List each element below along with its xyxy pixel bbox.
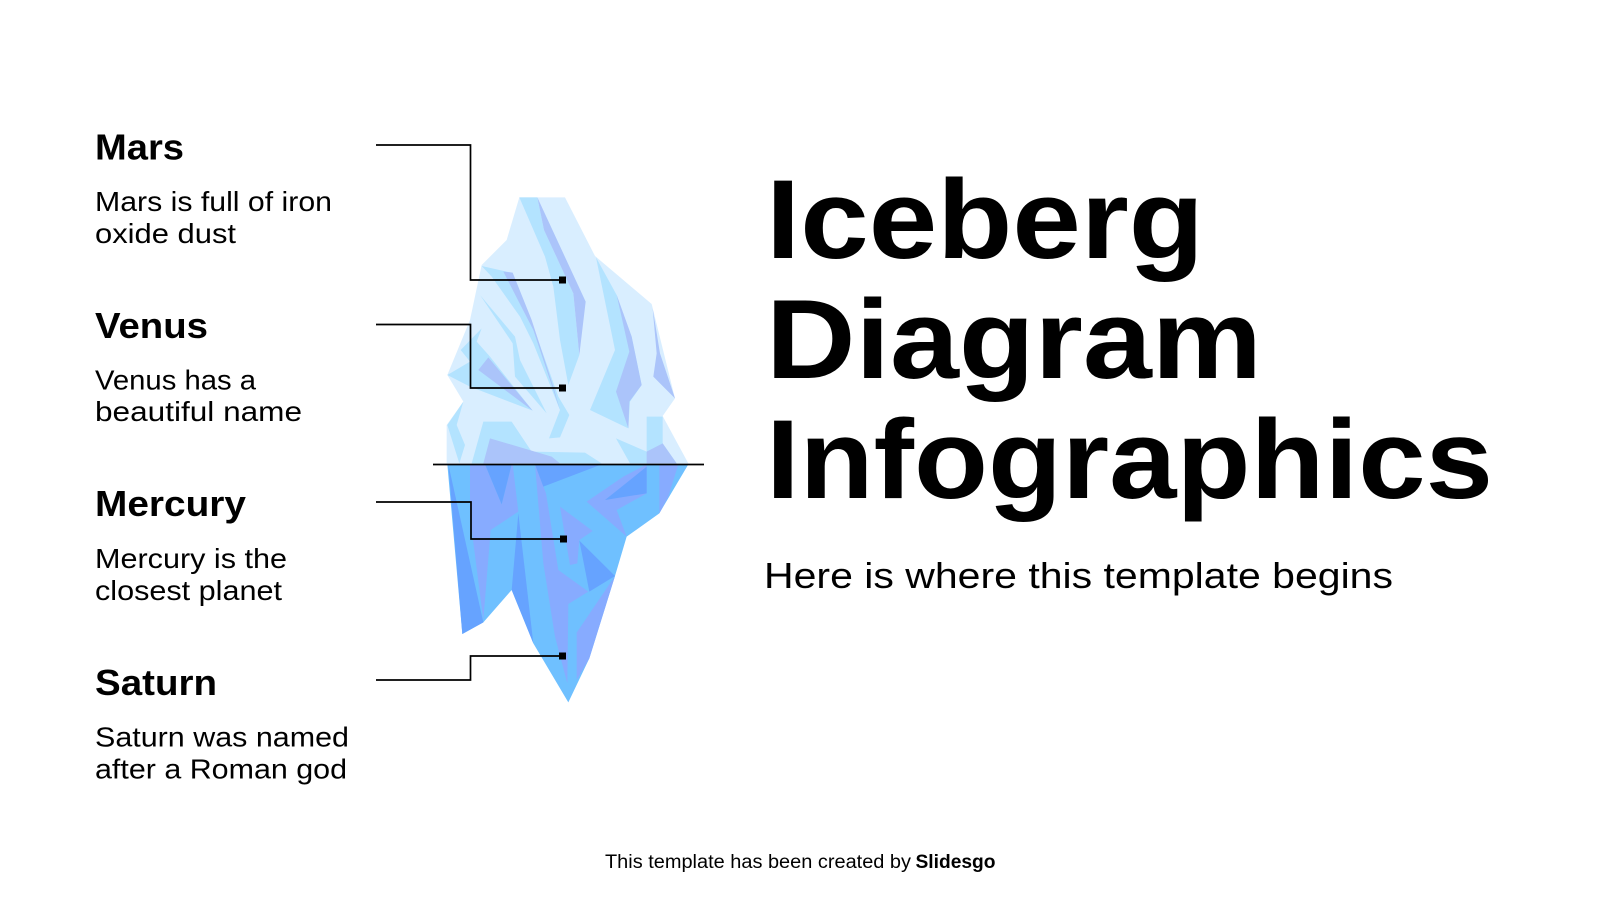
label: Saturn: Saturn was named bbox=[95, 722, 349, 752]
label: Mercury: Mercury bbox=[95, 483, 246, 524]
iceberg illustration bbox=[447, 197, 688, 702]
label: Mars: Mars bbox=[95, 126, 184, 168]
subtitle: Here is where this template begins bbox=[764, 555, 1393, 596]
label: Saturn bbox=[95, 662, 349, 784]
footer credit: Slidesgo bbox=[916, 852, 996, 873]
label: Saturn: Saturn bbox=[95, 662, 217, 703]
label: Saturn: after a Roman god bbox=[95, 754, 347, 784]
title: Diagram bbox=[766, 277, 1262, 402]
label: Mercury: closest planet bbox=[95, 575, 282, 606]
connector: Mars bbox=[376, 145, 566, 284]
label: Venus bbox=[95, 305, 302, 427]
label: Venus: Venus has a bbox=[95, 364, 256, 396]
title: Iceberg bbox=[766, 157, 1204, 282]
iceberg top above water bbox=[447, 197, 688, 463]
connector: Venus bbox=[376, 324, 566, 392]
title: Infographics bbox=[766, 397, 1493, 522]
title bbox=[766, 157, 1493, 522]
label: Mercury bbox=[95, 483, 287, 606]
label: Mars: Mars is full of iron bbox=[95, 186, 332, 217]
connector: Mercury bbox=[376, 502, 567, 542]
footer credit: This template has been created by bbox=[605, 852, 912, 873]
label: Mars: oxide dust bbox=[95, 218, 236, 249]
connector: Saturn bbox=[376, 652, 566, 680]
label: Venus: beautiful name bbox=[95, 396, 302, 427]
waterline bbox=[433, 464, 704, 466]
label: Mercury: Mercury is the bbox=[95, 543, 287, 574]
label: Venus: Venus bbox=[95, 305, 208, 346]
iceberg bottom under water bbox=[447, 464, 688, 702]
label: Mars bbox=[95, 126, 332, 249]
